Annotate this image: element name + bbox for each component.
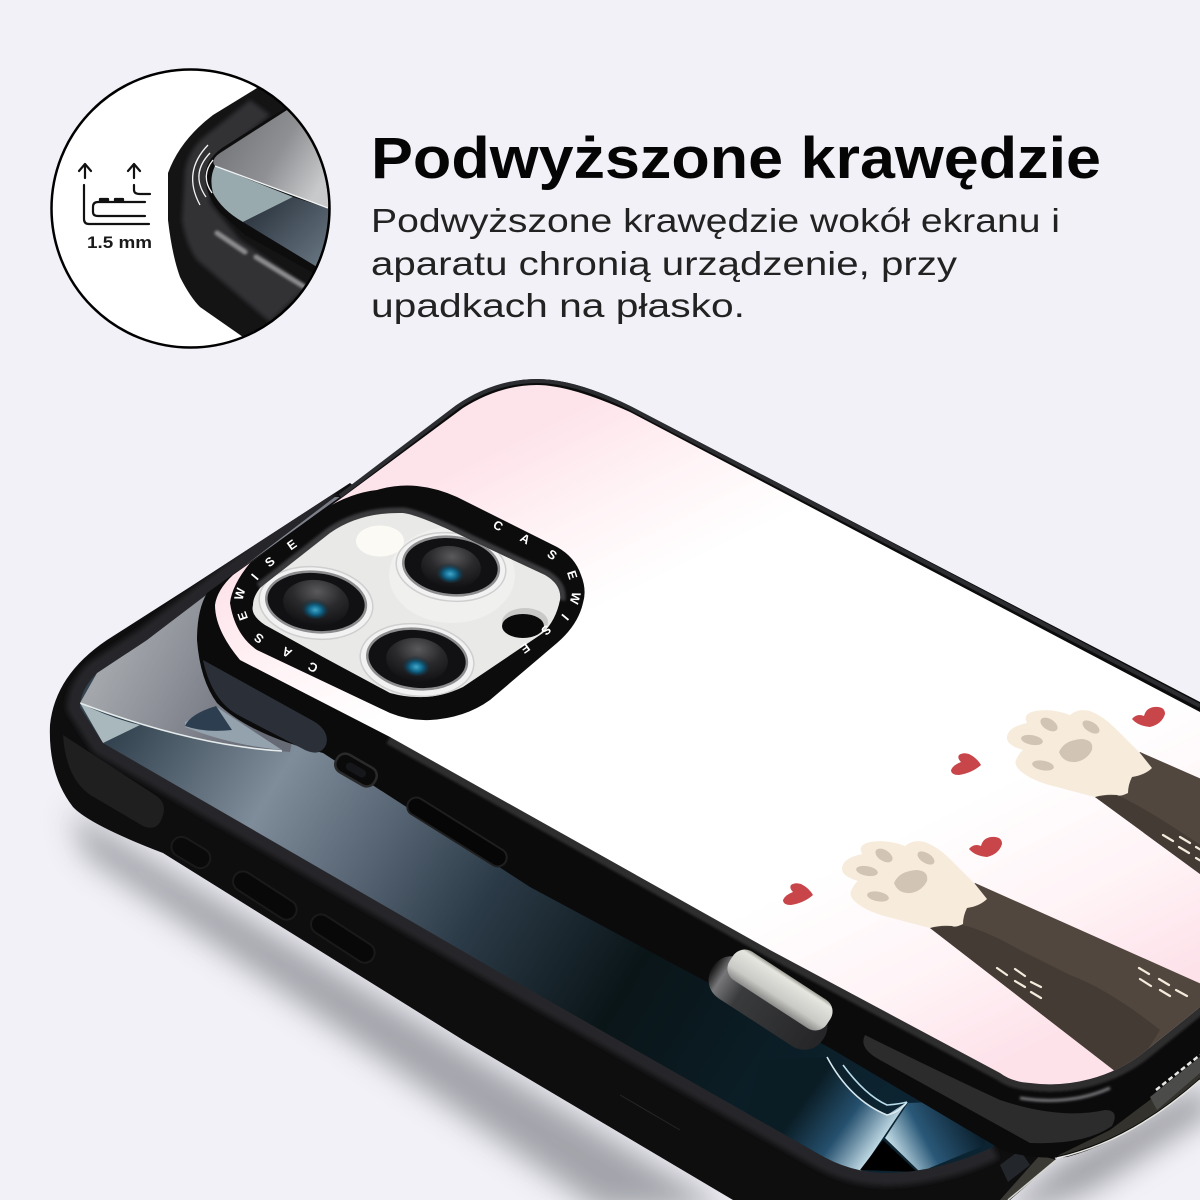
title: Podwyższone krawędzie	[371, 126, 1101, 191]
ring outer	[230, 486, 585, 720]
grey upper reflection	[80, 490, 340, 752]
ring brand lettering: A	[518, 531, 532, 547]
ring brand lettering: E	[518, 640, 532, 656]
carbon patch bottom	[863, 1035, 1115, 1143]
microphone hole	[502, 608, 548, 638]
inset white disc	[52, 70, 330, 348]
lens top right	[396, 532, 506, 602]
speaker teeth	[1156, 1055, 1200, 1090]
heart upper left	[951, 753, 981, 775]
lower case side line	[620, 1095, 680, 1130]
lens plateau	[444, 528, 512, 560]
ring brand lettering: E	[564, 569, 580, 581]
carbon patch upper-left	[203, 660, 327, 753]
volume up button	[229, 868, 300, 924]
description text	[371, 202, 1060, 324]
upper phone	[197, 379, 1200, 1158]
plate contents	[256, 526, 548, 702]
inset curved impact lines	[193, 145, 213, 205]
ring brand lettering: E	[285, 537, 299, 553]
pale wedge	[80, 703, 140, 743]
right blue glow	[885, 1102, 978, 1170]
thickness label: 1.5 mm	[87, 234, 152, 252]
white camera plate	[252, 513, 560, 697]
camera ring	[230, 486, 585, 720]
ring brand lettering: I	[559, 611, 571, 623]
inset outline	[52, 70, 330, 348]
pink back panel	[215, 385, 1200, 1084]
ring brand lettering: W	[232, 586, 248, 602]
inset dark screen	[243, 197, 330, 267]
black triangle	[860, 1140, 917, 1172]
white bottom edge line	[1057, 1080, 1200, 1158]
inset rim band	[182, 100, 307, 322]
olive side edge	[1000, 1155, 1056, 1200]
dark blue lobe	[185, 706, 232, 731]
drop shadows under phones	[70, 810, 1200, 1200]
ring brand lettering: C	[491, 518, 505, 534]
ring brand lettering: I	[249, 571, 261, 583]
long side button	[404, 794, 510, 870]
ring brand lettering: S	[252, 630, 266, 646]
inset phone corner photo	[168, 88, 328, 336]
lower phone corner carbon patch	[63, 735, 164, 828]
volume down button	[307, 911, 378, 967]
ring brand lettering: W	[567, 590, 583, 606]
ring brand lettering: E	[235, 610, 251, 622]
screen reflections	[80, 490, 985, 1172]
inset reflection line	[215, 166, 328, 208]
metal edge line	[1008, 1160, 1056, 1200]
inset case black	[168, 88, 316, 336]
circular detail inset	[52, 60, 340, 350]
lower phone power-side button	[168, 833, 214, 872]
lower paw	[842, 841, 987, 928]
screen seen through the case	[80, 497, 1040, 1173]
speaker edge	[1150, 1057, 1200, 1110]
mute switch	[332, 750, 380, 790]
lower phone case body	[50, 483, 1056, 1200]
left blue glow	[790, 1074, 905, 1170]
silver power button	[700, 944, 838, 1058]
lens top left	[258, 566, 374, 640]
upper paw	[1007, 710, 1152, 797]
inset grey screen	[213, 110, 328, 208]
heart lower left	[783, 883, 813, 905]
ring bevel	[260, 513, 560, 600]
inset rim dark inner	[205, 118, 316, 272]
lower arm	[930, 883, 1200, 1080]
description text: aparatu chronią urządzenie, przy	[371, 245, 958, 282]
description text: upadkach na płasko.	[371, 287, 745, 324]
ring brand lettering	[232, 518, 583, 675]
inner rim band	[390, 737, 1200, 1084]
ring brand lettering: A	[280, 644, 294, 660]
lens bottom	[360, 623, 474, 697]
pale wedge right	[185, 706, 282, 750]
ring brand lettering: S	[262, 554, 278, 570]
heart upper right	[1132, 707, 1165, 727]
inset pale wedge	[211, 166, 293, 222]
raised edge diagram icon	[79, 164, 150, 224]
reflection curve	[80, 703, 282, 751]
heart lower right	[969, 837, 1002, 857]
upper phone case body	[197, 379, 1200, 1158]
olive bottom edge	[1057, 1062, 1200, 1156]
lower phone rim highlight	[80, 497, 993, 1173]
curved light lines	[827, 1057, 907, 1115]
rim gloss highlight	[1020, 1088, 1110, 1100]
paw art	[783, 707, 1200, 1080]
ring brand lettering: S	[545, 547, 559, 563]
flash	[356, 526, 404, 556]
upper arm	[1095, 752, 1200, 885]
lower phone	[50, 483, 1056, 1200]
inset highlights	[217, 233, 303, 286]
upper edge highlight	[340, 381, 1200, 706]
lower phone side port	[1000, 1150, 1030, 1182]
ring brand lettering: C	[306, 659, 320, 675]
ring brand lettering: S	[538, 622, 554, 638]
description text: Podwyższone krawędzie wokół ekranu i	[371, 202, 1060, 239]
